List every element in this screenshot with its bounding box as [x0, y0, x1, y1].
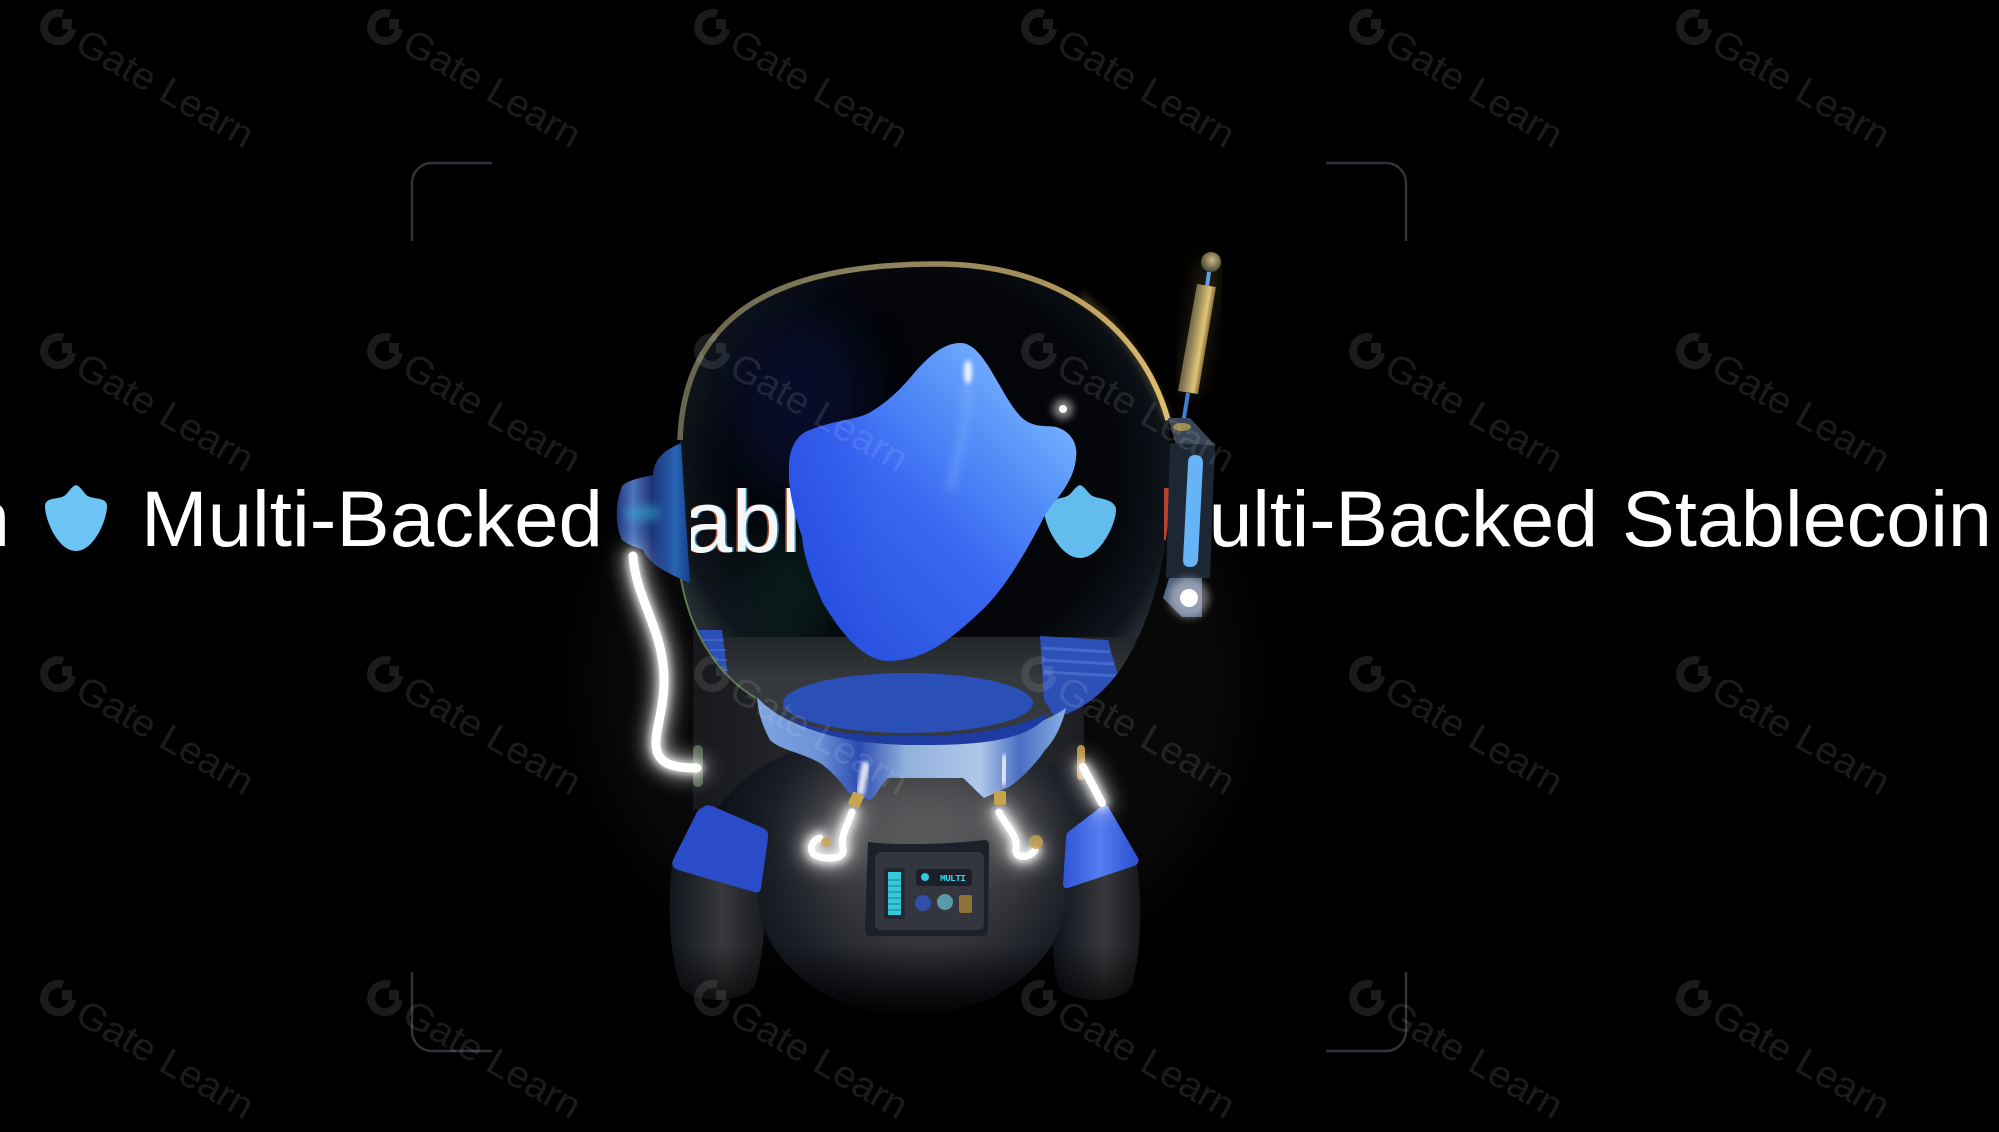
big blue shield	[789, 343, 1076, 661]
refracted text: abl	[684, 472, 802, 571]
watermark grid: Gate Learn	[396, 21, 588, 157]
cord chest left	[811, 812, 852, 858]
refracted text: abl	[682, 472, 799, 571]
glow slot	[1183, 455, 1203, 567]
cord shoulder right	[1083, 767, 1102, 803]
watermark grid: Gate Learn	[396, 668, 588, 804]
fade to black at bottom	[640, 945, 1170, 1025]
collar	[757, 697, 1066, 800]
helmet glass	[680, 262, 1171, 747]
watermark grid: Gate Learn	[1378, 992, 1570, 1128]
watermark grid: Gate Learn	[1050, 345, 1242, 481]
neck column	[693, 630, 1084, 810]
collar highlight right	[1003, 755, 1005, 785]
glowing cords	[633, 556, 1102, 858]
watermark grid: Gate Learn	[1050, 21, 1242, 157]
box front	[1166, 443, 1215, 578]
switch	[959, 895, 972, 913]
reflection sparkle	[1053, 399, 1073, 419]
mascot	[617, 252, 1221, 1025]
watermark grid: Gate Learn	[1378, 21, 1570, 157]
antenna tube	[1178, 284, 1216, 394]
right arm	[1053, 865, 1140, 1000]
ear cyan highlight	[626, 505, 660, 521]
antenna lower rod	[1183, 393, 1188, 424]
chest control panel	[865, 840, 989, 936]
collar inner band	[772, 703, 1050, 745]
watermark grid: Gate Learn	[722, 21, 915, 157]
display shield	[921, 873, 929, 881]
left ear piece	[617, 443, 690, 583]
box bottom	[1163, 575, 1202, 617]
watermark grid: Gate Learn	[396, 345, 588, 481]
antenna	[1178, 252, 1221, 424]
helmet rim	[680, 264, 1168, 440]
icon: shield left	[45, 485, 107, 551]
base ellipse	[1173, 423, 1191, 431]
watermark grid: Gate Learn	[68, 345, 261, 481]
watermark grid: Gate Learn	[1050, 668, 1242, 804]
shield highlight	[964, 360, 972, 384]
watermark grid: Gate Learn	[722, 345, 915, 481]
left arm	[670, 865, 765, 1000]
right connector	[1077, 745, 1085, 780]
gold connectors	[821, 791, 1043, 849]
box top face	[1168, 418, 1215, 445]
body	[712, 745, 1108, 1015]
strap right ribs	[1042, 648, 1118, 676]
watermark grid: Gate Learn	[68, 992, 261, 1128]
button teal	[937, 894, 953, 910]
scrolling title band: Multi-Backed	[141, 474, 603, 563]
display	[916, 869, 972, 886]
watermark grid: Gate Learn	[396, 992, 588, 1128]
cuff left	[672, 805, 768, 892]
antenna glow	[1188, 262, 1211, 392]
faint glow around mascot	[585, 380, 1245, 980]
display label: MULTI	[940, 873, 966, 884]
cuff right	[1063, 805, 1138, 888]
scrolling title band	[0, 485, 1987, 551]
watermark grid: Gate Learn	[1704, 21, 1897, 157]
battery	[884, 868, 905, 919]
neck seen through glass	[726, 637, 1138, 736]
panel frame	[865, 840, 989, 936]
panel face	[875, 852, 984, 930]
rim glow	[1080, 295, 1168, 420]
strap left	[698, 630, 728, 674]
watermark grid: Gate Learn	[1378, 345, 1570, 481]
shield crease highlight	[950, 380, 968, 490]
scrolling title band: Multi-Backed	[1143, 474, 1598, 563]
antenna ball	[1201, 252, 1221, 272]
button blue	[915, 895, 931, 911]
strap right	[1040, 636, 1118, 716]
refracted text: abl	[683, 472, 800, 571]
refracted shield	[1044, 485, 1116, 558]
glow on body	[800, 775, 1050, 875]
right ear box	[1163, 418, 1215, 618]
helmet rim lower left	[680, 573, 756, 698]
strap left ribs	[702, 639, 728, 671]
tint: green	[744, 532, 834, 637]
cord left	[633, 556, 697, 768]
watermark grid: Gate Learn	[1050, 992, 1242, 1128]
antenna upper rod	[1207, 272, 1209, 287]
refracted red letter	[1164, 488, 1169, 540]
tint: navy	[730, 310, 870, 490]
watermark grid: Gate Learn	[722, 992, 915, 1128]
watermark grid: Gate Learn	[68, 668, 261, 804]
light	[1169, 578, 1209, 618]
refracted text	[691, 488, 796, 553]
cord chest right	[999, 812, 1035, 856]
watermark grid: Gate Learn	[722, 668, 915, 804]
scrolling title band: Stablecoin	[1622, 474, 1992, 563]
watermark grid: Gate Learn	[1704, 992, 1897, 1128]
neck disc	[783, 673, 1033, 733]
helmet contents	[680, 310, 1176, 770]
watermark grid: Gate Learn	[1704, 668, 1897, 804]
watermark grid: Gate Learn	[1704, 345, 1897, 481]
watermark grid: Gate Learn	[68, 21, 261, 157]
corner brackets	[412, 163, 1406, 1051]
watermark grid: Gate Learn	[1378, 668, 1570, 804]
collar highlight left	[860, 762, 866, 795]
left connector	[693, 745, 703, 787]
